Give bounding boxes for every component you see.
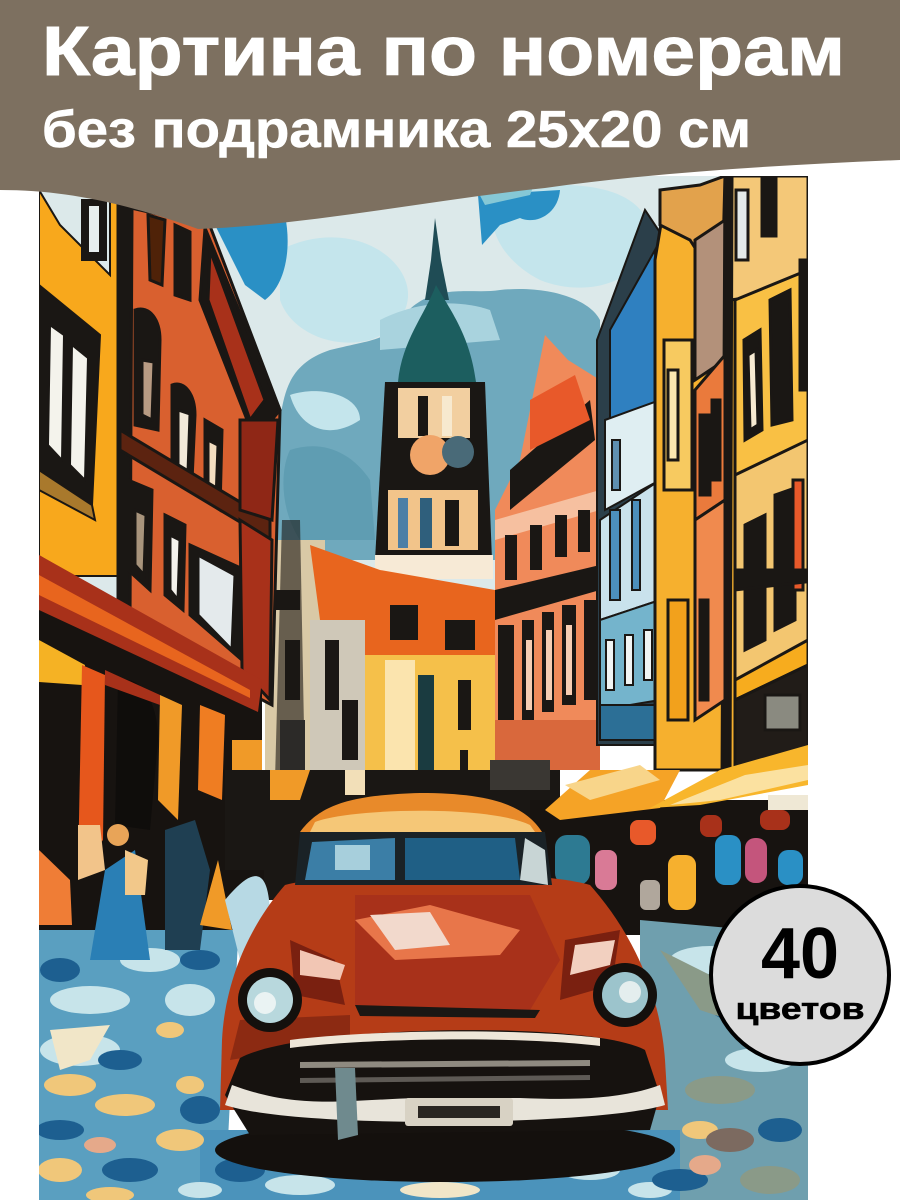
radiator grille bbox=[225, 1030, 660, 1135]
left yellow building bbox=[39, 192, 116, 577]
cobblestone street bbox=[36, 900, 808, 1200]
right headlight bbox=[593, 963, 657, 1027]
church tower bbox=[375, 218, 493, 579]
bumper bbox=[225, 1085, 665, 1122]
licence plate bbox=[405, 1098, 513, 1126]
street background crowd bbox=[225, 760, 560, 900]
windshield bbox=[295, 832, 552, 885]
right crowd figures bbox=[555, 810, 803, 910]
car roof bbox=[300, 793, 542, 832]
right blue building bbox=[597, 210, 665, 745]
left storefronts bbox=[39, 555, 262, 880]
badge: 40 colours: цветов bbox=[736, 991, 864, 1026]
car body bbox=[220, 873, 668, 1110]
badge: 40 colours bbox=[711, 886, 889, 1064]
right awnings bbox=[530, 745, 808, 935]
car shadow bbox=[215, 1130, 675, 1182]
right brick building bbox=[495, 335, 600, 770]
badge: 40 colours: 40 bbox=[761, 914, 839, 994]
sky bbox=[78, 176, 720, 598]
right yellow buildings bbox=[655, 176, 808, 780]
subtitle: без подрамника 25х20 см bbox=[42, 101, 751, 159]
header banner bbox=[0, 0, 900, 229]
title: Картина по номерам bbox=[42, 12, 845, 90]
left headlight bbox=[238, 968, 302, 1032]
painting: old town street with red car bbox=[36, 176, 808, 1200]
central building with orange roof bbox=[265, 520, 495, 795]
left crowd figures bbox=[39, 820, 270, 960]
vintage car bbox=[215, 793, 675, 1182]
left red brick building bbox=[118, 205, 280, 705]
